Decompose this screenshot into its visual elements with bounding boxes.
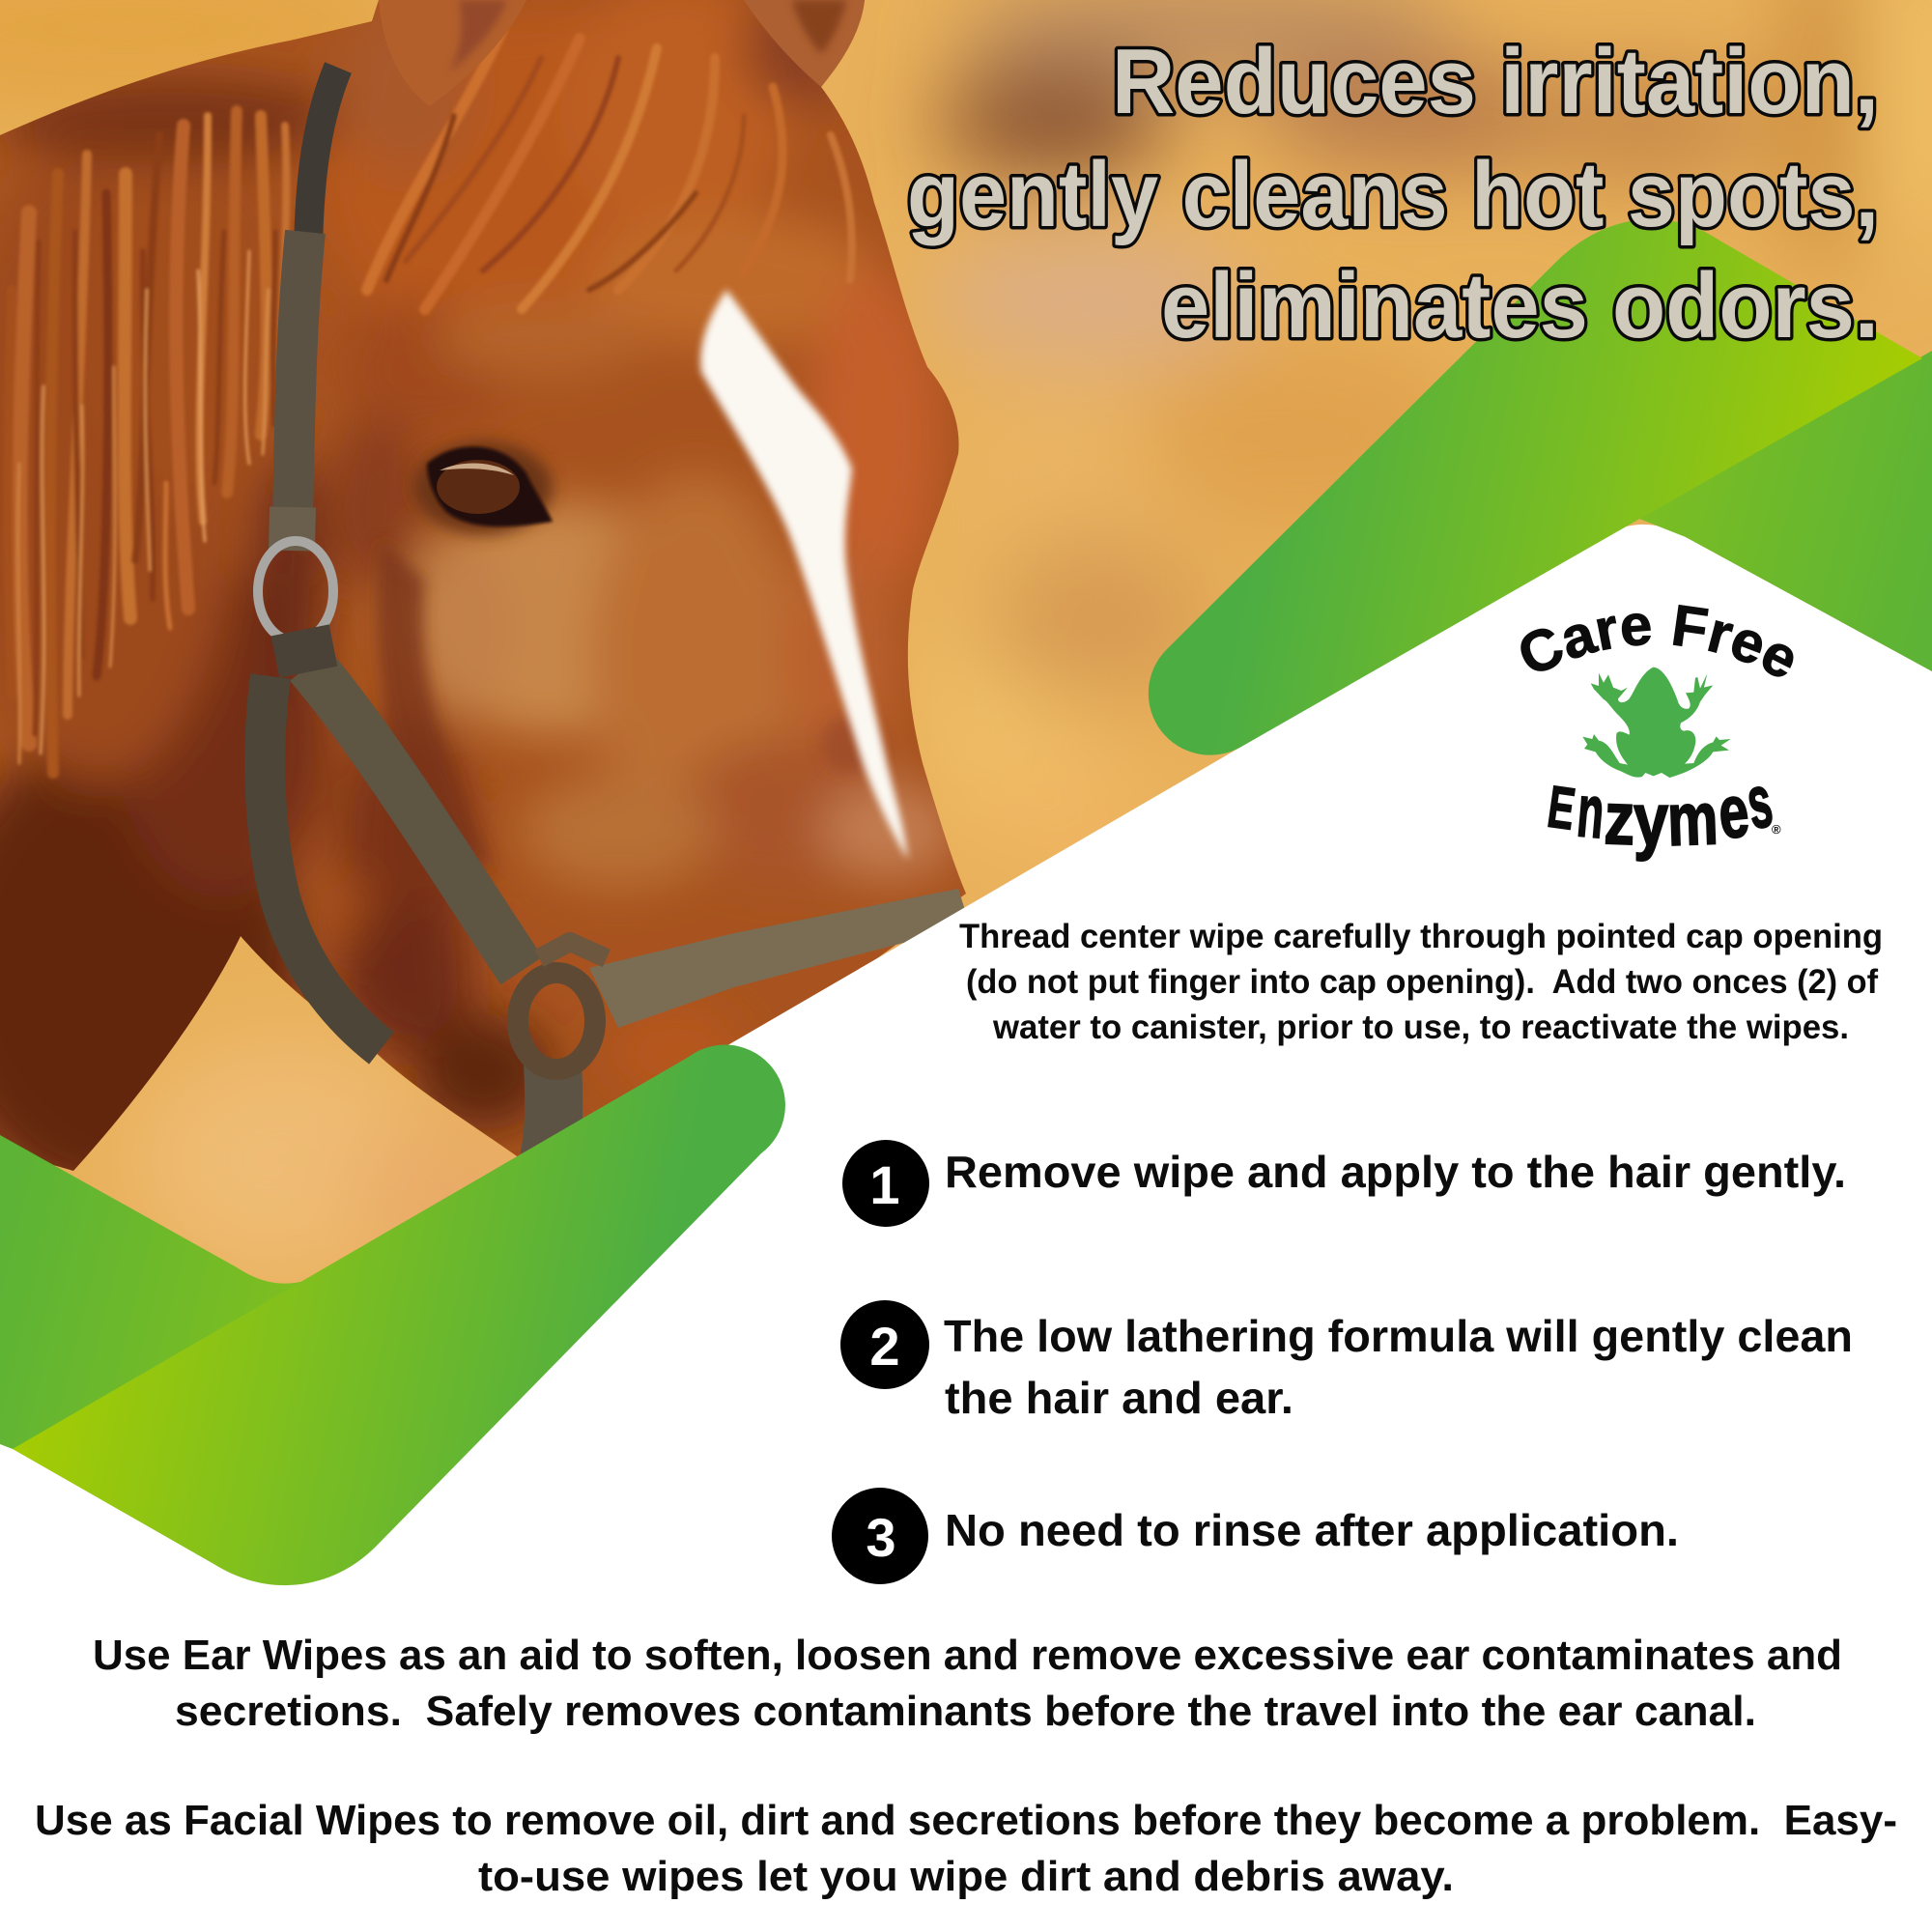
logo text: Enzymes: n — [1575, 770, 1607, 854]
photo background: blurred golden field — [0, 0, 1932, 1352]
logo text: Enzymes: s — [1741, 760, 1778, 845]
ear wipes description — [93, 1632, 1842, 1735]
instructions paragraph — [959, 918, 1883, 1046]
instructions paragraph: (do not put finger into cap opening). Add two onces (2) of — [966, 963, 1878, 1001]
green shape: upper right dark band — [1639, 351, 1932, 671]
white content panel — [0, 525, 1932, 1932]
horse colour modelling — [0, 0, 956, 1198]
step 1: 1 — [869, 1154, 900, 1215]
ear wipes description: secretions. Safely removes contaminants before the travel into the ear canal. — [175, 1688, 1756, 1735]
step 3: 3 — [866, 1507, 896, 1568]
lower ring — [518, 973, 595, 1069]
cheek strap — [309, 665, 522, 971]
headline: Reduces irritation, — [1112, 30, 1879, 133]
horse eye — [413, 441, 553, 534]
logo text: Enzymes: m — [1666, 778, 1719, 862]
step 2: The low lathering formula will gently clean — [944, 1311, 1853, 1361]
step 2 — [840, 1300, 1853, 1423]
logo text: Enzymes: e — [1715, 769, 1752, 855]
mane strands — [8, 111, 286, 773]
white blaze — [700, 290, 908, 860]
forelock strands — [367, 29, 852, 309]
upper ring — [258, 541, 333, 641]
halter straps and rings — [258, 68, 970, 1159]
logo text: Enzymes: E — [1544, 774, 1578, 843]
step 2: 2 — [869, 1316, 900, 1377]
logo text: Enzymes: z — [1603, 776, 1636, 860]
logo text: Care Free: Care Free — [1520, 605, 1793, 677]
step 3: No need to rinse after application. — [945, 1505, 1679, 1555]
green shape: lower left dark band — [0, 1135, 324, 1449]
throat strap — [265, 676, 382, 1048]
headline: eliminates odors. — [1161, 254, 1879, 357]
ear wipes description: Use Ear Wipes as an aid to soften, loosen and remove excessive ear contaminates and — [93, 1632, 1842, 1679]
facial wipes description: Use as Facial Wipes to remove oil, dirt and secretions before they become a problem. Easy- — [35, 1797, 1897, 1844]
photo: chestnut horse head — [0, 0, 985, 1256]
noseband — [589, 889, 970, 1028]
step 1: Remove wipe and apply to the hair gently. — [945, 1147, 1846, 1197]
horse ears — [379, 0, 865, 106]
green shape: upper right wedge — [1149, 219, 1922, 755]
instructions paragraph: water to canister, prior to use, to reactivate the wipes. — [992, 1009, 1849, 1046]
instructions paragraph: Thread center wipe carefully through pointed cap opening — [959, 918, 1883, 955]
green shape: lower left wedge — [13, 1045, 785, 1585]
logo text: Enzymes: y — [1634, 780, 1668, 862]
step 3 — [832, 1488, 1679, 1584]
logo text: Enzymes — [1544, 760, 1778, 862]
facial wipes description — [35, 1797, 1897, 1900]
logo: Care Free Enzymes — [1520, 605, 1793, 862]
step 1 — [842, 1140, 1846, 1227]
headline: gently cleans hot spots, — [907, 143, 1879, 246]
icon: green frog — [1582, 668, 1731, 778]
chin strap — [549, 1063, 554, 1159]
cheek shadow under eye — [377, 541, 879, 869]
registered mark: ® — [1772, 822, 1781, 837]
facial wipes description: to-use wipes let you wipe dirt and debris away. — [478, 1853, 1454, 1900]
headline — [907, 30, 1879, 357]
step 2: the hair and ear. — [945, 1373, 1293, 1423]
